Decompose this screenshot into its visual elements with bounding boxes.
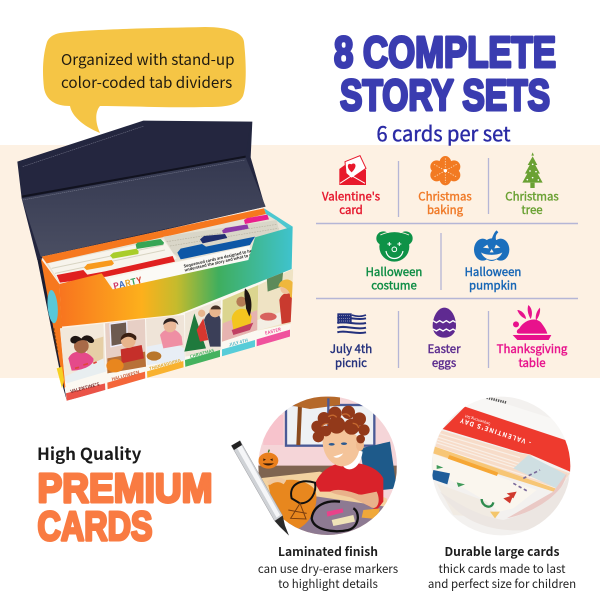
card sample letters: Y xyxy=(134,274,144,287)
durable cards illustration xyxy=(432,396,570,536)
callout text: color-coded tab dividers xyxy=(61,71,232,93)
premium: PREMIUM xyxy=(38,465,212,511)
card sample letters: R xyxy=(124,277,132,290)
label: easter eggs: Easter xyxy=(427,341,461,357)
card sample letters: P xyxy=(112,279,121,292)
premium heading xyxy=(37,440,212,549)
label: christmas tree: tree xyxy=(521,202,543,218)
strip captions: HALLOWEEN xyxy=(111,370,141,383)
label: july 4th picnic: picnic xyxy=(335,355,367,371)
callout text: Organized with stand-up xyxy=(61,48,235,70)
strip captions: JULY 4TH xyxy=(228,338,249,348)
icons xyxy=(337,152,551,340)
panel halloween xyxy=(105,318,146,373)
label: halloween pumpkin: Halloween xyxy=(465,264,521,280)
product box xyxy=(17,121,294,401)
label: valentine's card: card xyxy=(339,202,363,218)
caption: durable large cards: Durable large cards xyxy=(445,543,559,560)
card sample text: Sequenced cards are designed to help kids xyxy=(183,245,265,270)
caption: durable large cards xyxy=(428,543,576,592)
caption: laminated finish: Laminated finish xyxy=(278,543,378,560)
label: easter eggs: eggs xyxy=(432,355,456,371)
panel easter xyxy=(257,268,294,331)
caption: durable large cards: and perfect size for children xyxy=(428,576,576,592)
left card stack xyxy=(48,239,177,293)
caption: laminated finish: to highlight details xyxy=(278,576,378,592)
background band xyxy=(0,145,600,378)
label: halloween costume: costume xyxy=(371,278,417,294)
strip captions: VALENTINE'S xyxy=(69,382,100,395)
icon: clown face xyxy=(376,231,413,262)
card sample letters: A xyxy=(117,278,126,291)
card sample letters: T xyxy=(130,275,138,288)
durable cards illustration: - VALENTINE'S DAY xyxy=(458,416,532,448)
subtitle: 6 cards per set xyxy=(376,118,511,147)
panel thanksgiving xyxy=(146,315,185,365)
panel july xyxy=(222,285,258,342)
icon: christmas tree xyxy=(522,152,543,188)
marker pen xyxy=(231,441,289,536)
label: july 4th picnic: July 4th xyxy=(330,341,372,357)
panel valentine xyxy=(60,323,106,383)
box interior back xyxy=(42,208,293,284)
label: halloween pumpkin: pumpkin xyxy=(469,278,517,294)
label: thanksgiving table: Thanksgiving xyxy=(497,341,568,357)
icon labels xyxy=(322,188,568,371)
front rainbow flap xyxy=(59,227,293,327)
icon: american flag xyxy=(337,313,366,333)
colour bars xyxy=(66,330,290,401)
laminated finish illustration xyxy=(231,395,403,538)
icon: pumpkin xyxy=(474,230,509,261)
label: valentine's card: Valentine's xyxy=(322,188,380,204)
panel christmas xyxy=(184,300,221,357)
card sample text: understand the story and what to do xyxy=(184,252,255,274)
icon: easter egg xyxy=(433,308,456,338)
strip captions: THANKSGIVING xyxy=(149,358,182,372)
caption: laminated finish: can use dry-erase markers xyxy=(258,561,398,577)
icon: valentine envelope xyxy=(339,156,366,185)
orange side panel xyxy=(41,258,66,388)
caption: durable large cards: thick cards made to last xyxy=(438,561,566,577)
icon: baking flower xyxy=(430,156,460,185)
speech bubble callout xyxy=(43,27,246,133)
label: christmas tree: Christmas xyxy=(505,188,559,204)
card sample letters xyxy=(112,274,144,292)
title xyxy=(334,28,556,120)
caption: laminated finish xyxy=(258,543,398,592)
high quality: High Quality xyxy=(37,440,142,465)
strip captions: EASTER xyxy=(264,327,282,337)
right card stack xyxy=(110,215,279,292)
cards: CARDS xyxy=(38,503,152,549)
strip captions: CHRISTMAS xyxy=(189,348,215,360)
label: halloween costume: Halloween xyxy=(366,264,422,280)
strip captions xyxy=(69,327,282,395)
label: christmas baking: baking xyxy=(427,202,464,218)
curly hair xyxy=(311,406,370,443)
illustrated strip xyxy=(60,268,294,401)
label: christmas baking: Christmas xyxy=(418,188,472,204)
box dark left edge xyxy=(37,258,67,400)
label: thanksgiving table: table xyxy=(518,355,546,371)
icon: turkey xyxy=(513,305,551,340)
box lid xyxy=(17,121,266,260)
icon grid dividers xyxy=(316,158,578,368)
durable cards illustration: Sequencing Set xyxy=(464,413,491,426)
